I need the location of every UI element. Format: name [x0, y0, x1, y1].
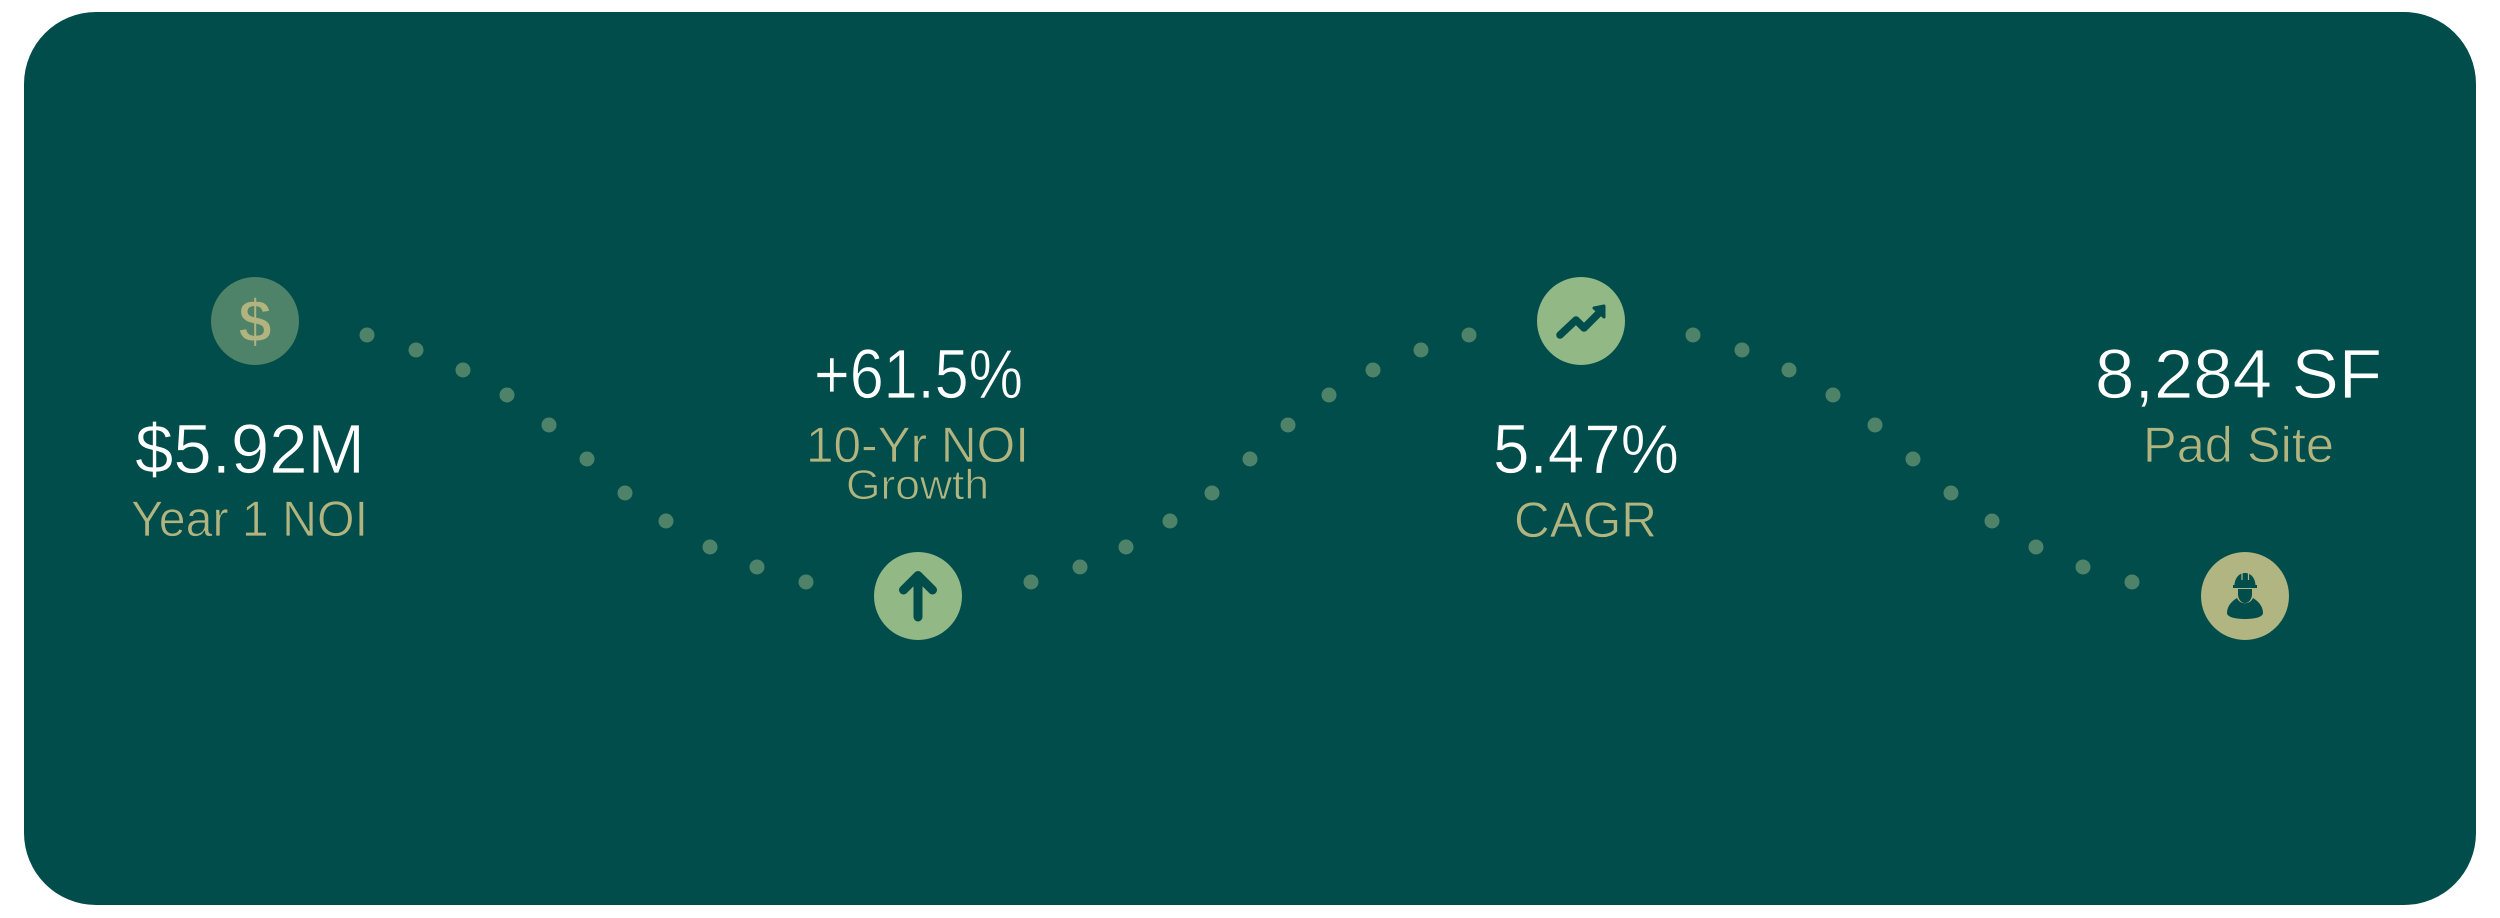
- icon: construction worker: [2201, 552, 2289, 640]
- metric: CAGR: CAGR: [1514, 492, 1657, 548]
- icon: dollar sign: $: [238, 288, 272, 355]
- metric: Pad Site: Pad Site: [2143, 417, 2334, 473]
- metric: 10-Yr NOI Growth: Growth: [846, 461, 989, 508]
- dotted wave: segment 3: [1686, 328, 2140, 590]
- dotted wave: segment 1: [360, 328, 814, 590]
- metric: 10-Yr NOI Growth: 10-Yr NOI: [806, 417, 1029, 473]
- metric: Year 1 NOI: Year 1 NOI: [131, 491, 368, 547]
- icon: dollar sign: [211, 277, 299, 365]
- metric: 10-Yr NOI Growth: +61.5%: [814, 335, 1023, 413]
- metric: Pad Site: 8,284 SF: [2095, 335, 2382, 413]
- metric: 10-Yr NOI Growth: [806, 335, 1029, 508]
- metric: Pad Site: [2095, 335, 2382, 473]
- metric: Year 1 NOI: [131, 410, 368, 547]
- icon: up arrow: [874, 552, 962, 640]
- metric: Year 1 NOI: $5.92M: [135, 410, 365, 488]
- icon: trending chart: [1537, 277, 1625, 365]
- dotted wave: segment 2: [1024, 328, 1476, 590]
- metric: CAGR: [1493, 410, 1679, 548]
- metric: CAGR: 5.47%: [1493, 410, 1679, 488]
